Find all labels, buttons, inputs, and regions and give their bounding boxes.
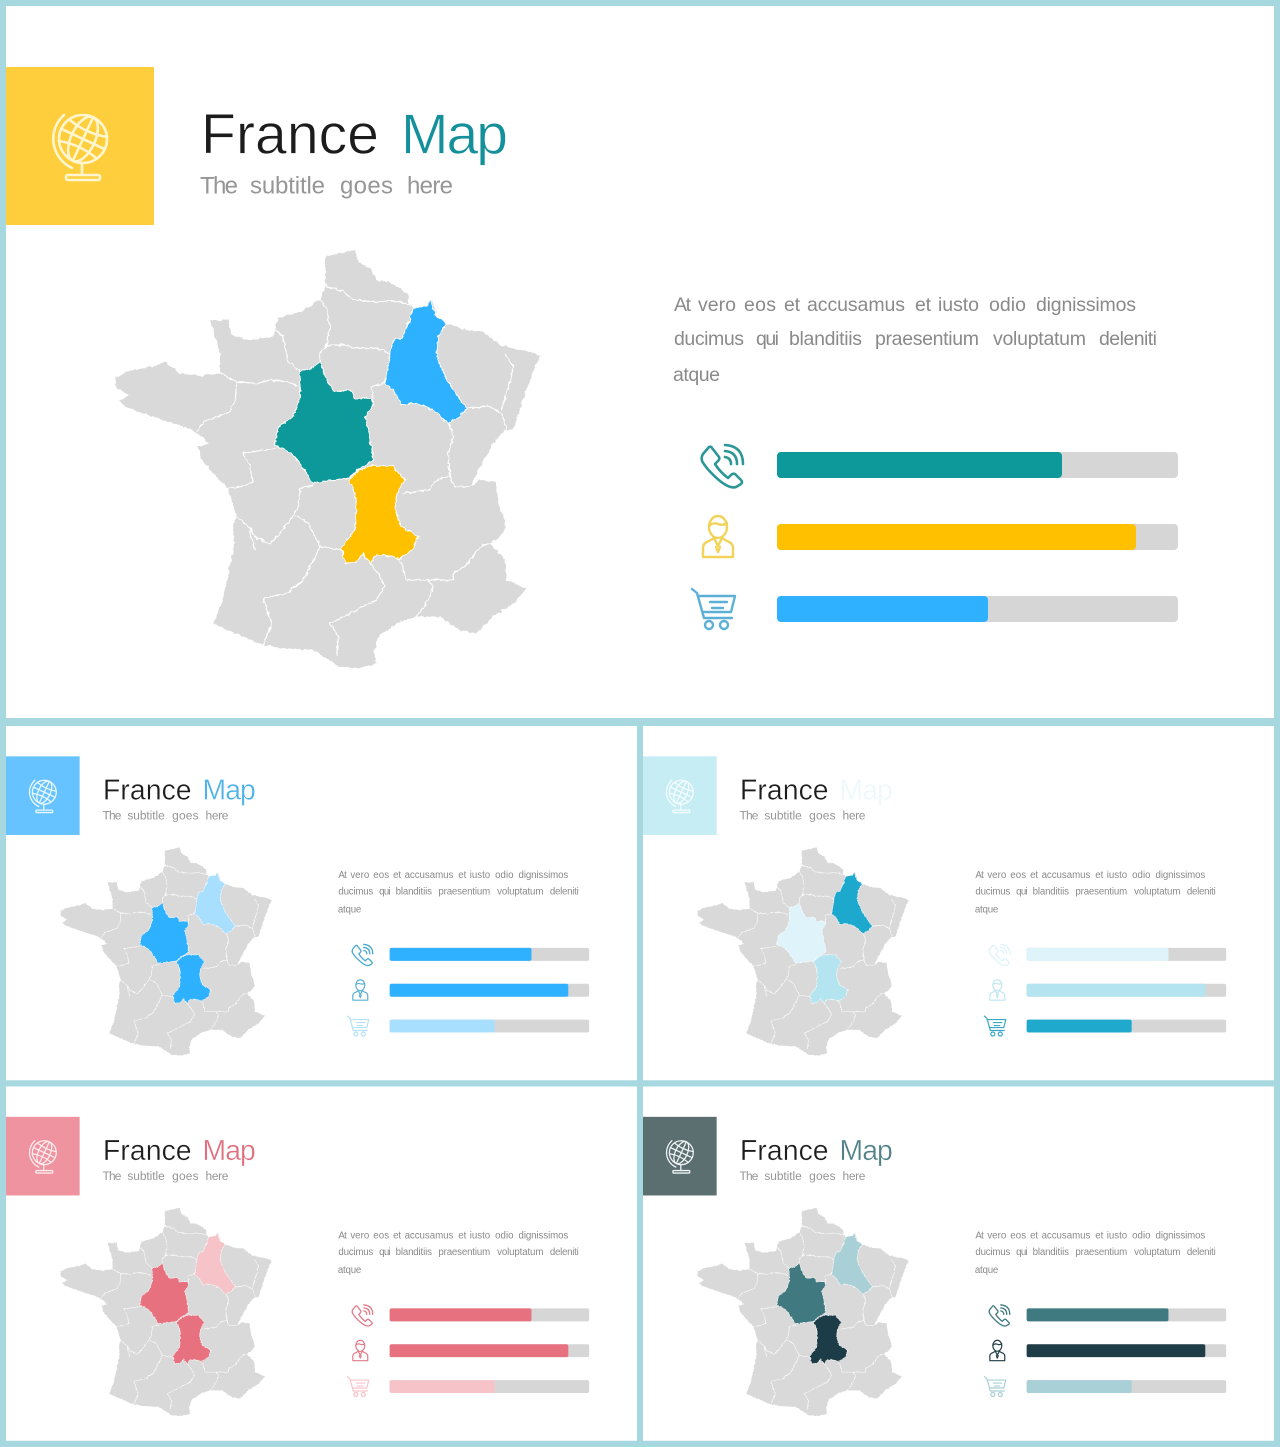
body text: voluptatum [497, 887, 543, 898]
body text: dignissimos [1156, 1230, 1205, 1241]
subtitle: subtitle [764, 808, 802, 822]
subtitle: subtitle [764, 1169, 802, 1183]
subtitle: goes [172, 808, 199, 822]
body text: ducimus [975, 1247, 1010, 1258]
body text: vero [987, 870, 1006, 881]
body text: qui [1016, 887, 1028, 898]
bar: person [390, 984, 589, 997]
body text: accusamus [405, 1230, 453, 1241]
icon: phone [702, 445, 743, 487]
body text: ducimus [338, 887, 373, 898]
body text: qui [379, 887, 391, 898]
panel: blue theme [6, 726, 637, 1080]
body text [975, 870, 1216, 916]
bar: person [777, 524, 1178, 550]
body text: atque [975, 1265, 998, 1276]
panel: dark teal theme [643, 1086, 1274, 1441]
bar: person [1027, 984, 1226, 997]
body text: accusamus [1042, 1230, 1090, 1241]
subtitle: here [843, 1169, 866, 1183]
panel: pink theme [6, 1086, 637, 1441]
body text: dignissimos [1036, 294, 1136, 316]
body text: accusamus [405, 870, 453, 881]
body text: ducimus [975, 887, 1010, 898]
title: France [740, 774, 829, 806]
body text: iusto [1107, 1230, 1127, 1241]
bar: phone [777, 452, 1178, 478]
body text: accusamus [1042, 870, 1090, 881]
icon: person [703, 516, 733, 557]
map of France with highlighted regions [115, 250, 540, 668]
bar: cart [1027, 1380, 1226, 1393]
subtitle: The [740, 808, 759, 822]
body text: ducimus [674, 328, 744, 350]
icon tile: globe on yellow [6, 67, 154, 225]
map of France with highlighted regions [697, 1208, 909, 1416]
body text: eos [373, 870, 389, 881]
body text: odio [1132, 870, 1151, 881]
subtitle: goes [172, 1169, 199, 1183]
bar: person [390, 1344, 589, 1357]
body text: deleniti [1099, 328, 1157, 350]
body text [673, 294, 1157, 386]
title: Map [401, 102, 508, 166]
subtitle: subtitle [250, 172, 325, 200]
title: Map [203, 1135, 256, 1167]
body text: et [458, 1230, 467, 1241]
body text: praesentium [438, 1247, 490, 1258]
body text: deleniti [550, 887, 579, 898]
subtitle: here [843, 808, 866, 822]
body text: eos [373, 1230, 389, 1241]
bar: cart [1027, 1020, 1226, 1033]
body text: atque [338, 1265, 361, 1276]
subtitle: here [206, 808, 229, 822]
body text: vero [698, 294, 736, 316]
body text [338, 870, 579, 916]
body text: eos [744, 294, 776, 316]
icon: cart [692, 589, 735, 629]
body text: et [458, 870, 467, 881]
icon tile: globe on slate [643, 1117, 717, 1195]
bar: person [1027, 1344, 1226, 1357]
subtitle: goes [809, 1169, 836, 1183]
title: Map [840, 1135, 893, 1167]
icon: phone [989, 1305, 1010, 1326]
panel: pale cyan theme [643, 726, 1274, 1080]
body text: praesentium [1075, 887, 1127, 898]
icon: cart [984, 1016, 1006, 1036]
bar: cart [390, 1020, 589, 1033]
body text [338, 1230, 579, 1276]
body text: odio [1132, 1230, 1151, 1241]
body text: At [674, 294, 692, 316]
panel: main slide, yellow theme [6, 6, 1274, 718]
subtitle: here [407, 172, 453, 200]
icon: phone [989, 944, 1010, 966]
bar: cart [390, 1380, 589, 1393]
subtitle: subtitle [127, 1169, 165, 1183]
body text: qui [1016, 1247, 1028, 1258]
subtitle: here [206, 1169, 229, 1183]
body text: iusto [938, 294, 979, 316]
body text: iusto [1107, 870, 1127, 881]
body text: At [975, 870, 984, 881]
map of France with highlighted regions [697, 847, 909, 1056]
title: France [740, 1135, 829, 1167]
icon: cart [984, 1377, 1006, 1396]
icon tile: globe on pale cyan [643, 756, 717, 835]
body text: deleniti [550, 1247, 579, 1258]
body text: praesentium [1075, 1247, 1127, 1258]
icon: person [990, 1340, 1005, 1361]
body text: At [338, 870, 347, 881]
body text: qui [756, 328, 779, 350]
body text: voluptatum [497, 1247, 543, 1258]
subtitle: The [103, 1169, 122, 1183]
body text: eos [1010, 870, 1026, 881]
body text: et [915, 294, 932, 316]
subtitle: subtitle [127, 808, 165, 822]
body text: vero [350, 870, 369, 881]
body text: et [1095, 1230, 1104, 1241]
title: France [201, 102, 379, 166]
body text: blanditiis [789, 328, 862, 350]
body text: voluptatum [1134, 1247, 1180, 1258]
body text: et [393, 1230, 401, 1241]
body text: atque [338, 905, 361, 916]
body text: deleniti [1187, 887, 1216, 898]
body text: et [784, 294, 801, 316]
icon: phone [352, 1305, 373, 1326]
icon: person [990, 980, 1005, 1000]
bar: phone [390, 1308, 589, 1321]
subtitle: The [103, 808, 122, 822]
title: Map [840, 774, 893, 806]
body text: praesentium [438, 887, 490, 898]
icon: cart [347, 1377, 369, 1396]
bar: phone [1027, 1308, 1226, 1321]
body text: blanditiis [1033, 887, 1069, 898]
subtitle: goes [809, 808, 836, 822]
body text: iusto [470, 1230, 490, 1241]
body text: At [975, 1230, 984, 1241]
body text: atque [975, 905, 998, 916]
map of France with highlighted regions [60, 847, 272, 1056]
body text: odio [495, 870, 514, 881]
body text: praesentium [875, 328, 979, 350]
icon: person [353, 980, 368, 1000]
body text: voluptatum [1134, 887, 1180, 898]
title: France [103, 774, 192, 806]
body text: eos [1010, 1230, 1026, 1241]
body text: vero [987, 1230, 1006, 1241]
body text: qui [379, 1247, 391, 1258]
icon: phone [352, 944, 373, 966]
body text: et [393, 870, 401, 881]
body text: blanditiis [1033, 1247, 1069, 1258]
body text: At [338, 1230, 347, 1241]
body text [975, 1230, 1216, 1276]
title: Map [203, 774, 256, 806]
body text: blanditiis [396, 887, 432, 898]
subtitle: The [200, 172, 238, 200]
body text: deleniti [1187, 1247, 1216, 1258]
body text: voluptatum [993, 328, 1086, 350]
body text: et [1030, 870, 1038, 881]
bar: phone [390, 948, 589, 961]
body text: dignissimos [519, 870, 568, 881]
body text: atque [673, 364, 720, 386]
subtitle: The [740, 1169, 759, 1183]
icon: cart [347, 1016, 369, 1036]
body text: odio [989, 294, 1026, 316]
icon tile: globe on blue [6, 756, 80, 835]
icon: person [353, 1340, 368, 1361]
body text: dignissimos [519, 1230, 568, 1241]
bar: cart [777, 596, 1178, 622]
body text: accusamus [807, 294, 905, 316]
body text: et [1030, 1230, 1038, 1241]
map of France with highlighted regions [60, 1208, 272, 1416]
body text: vero [350, 1230, 369, 1241]
body text: iusto [470, 870, 490, 881]
title: France [103, 1135, 192, 1167]
body text: et [1095, 870, 1104, 881]
body text: odio [495, 1230, 514, 1241]
icon tile: globe on pink [6, 1117, 80, 1195]
body text: ducimus [338, 1247, 373, 1258]
subtitle: goes [340, 172, 393, 200]
body text: blanditiis [396, 1247, 432, 1258]
bar: phone [1027, 948, 1226, 961]
body text: dignissimos [1156, 870, 1205, 881]
